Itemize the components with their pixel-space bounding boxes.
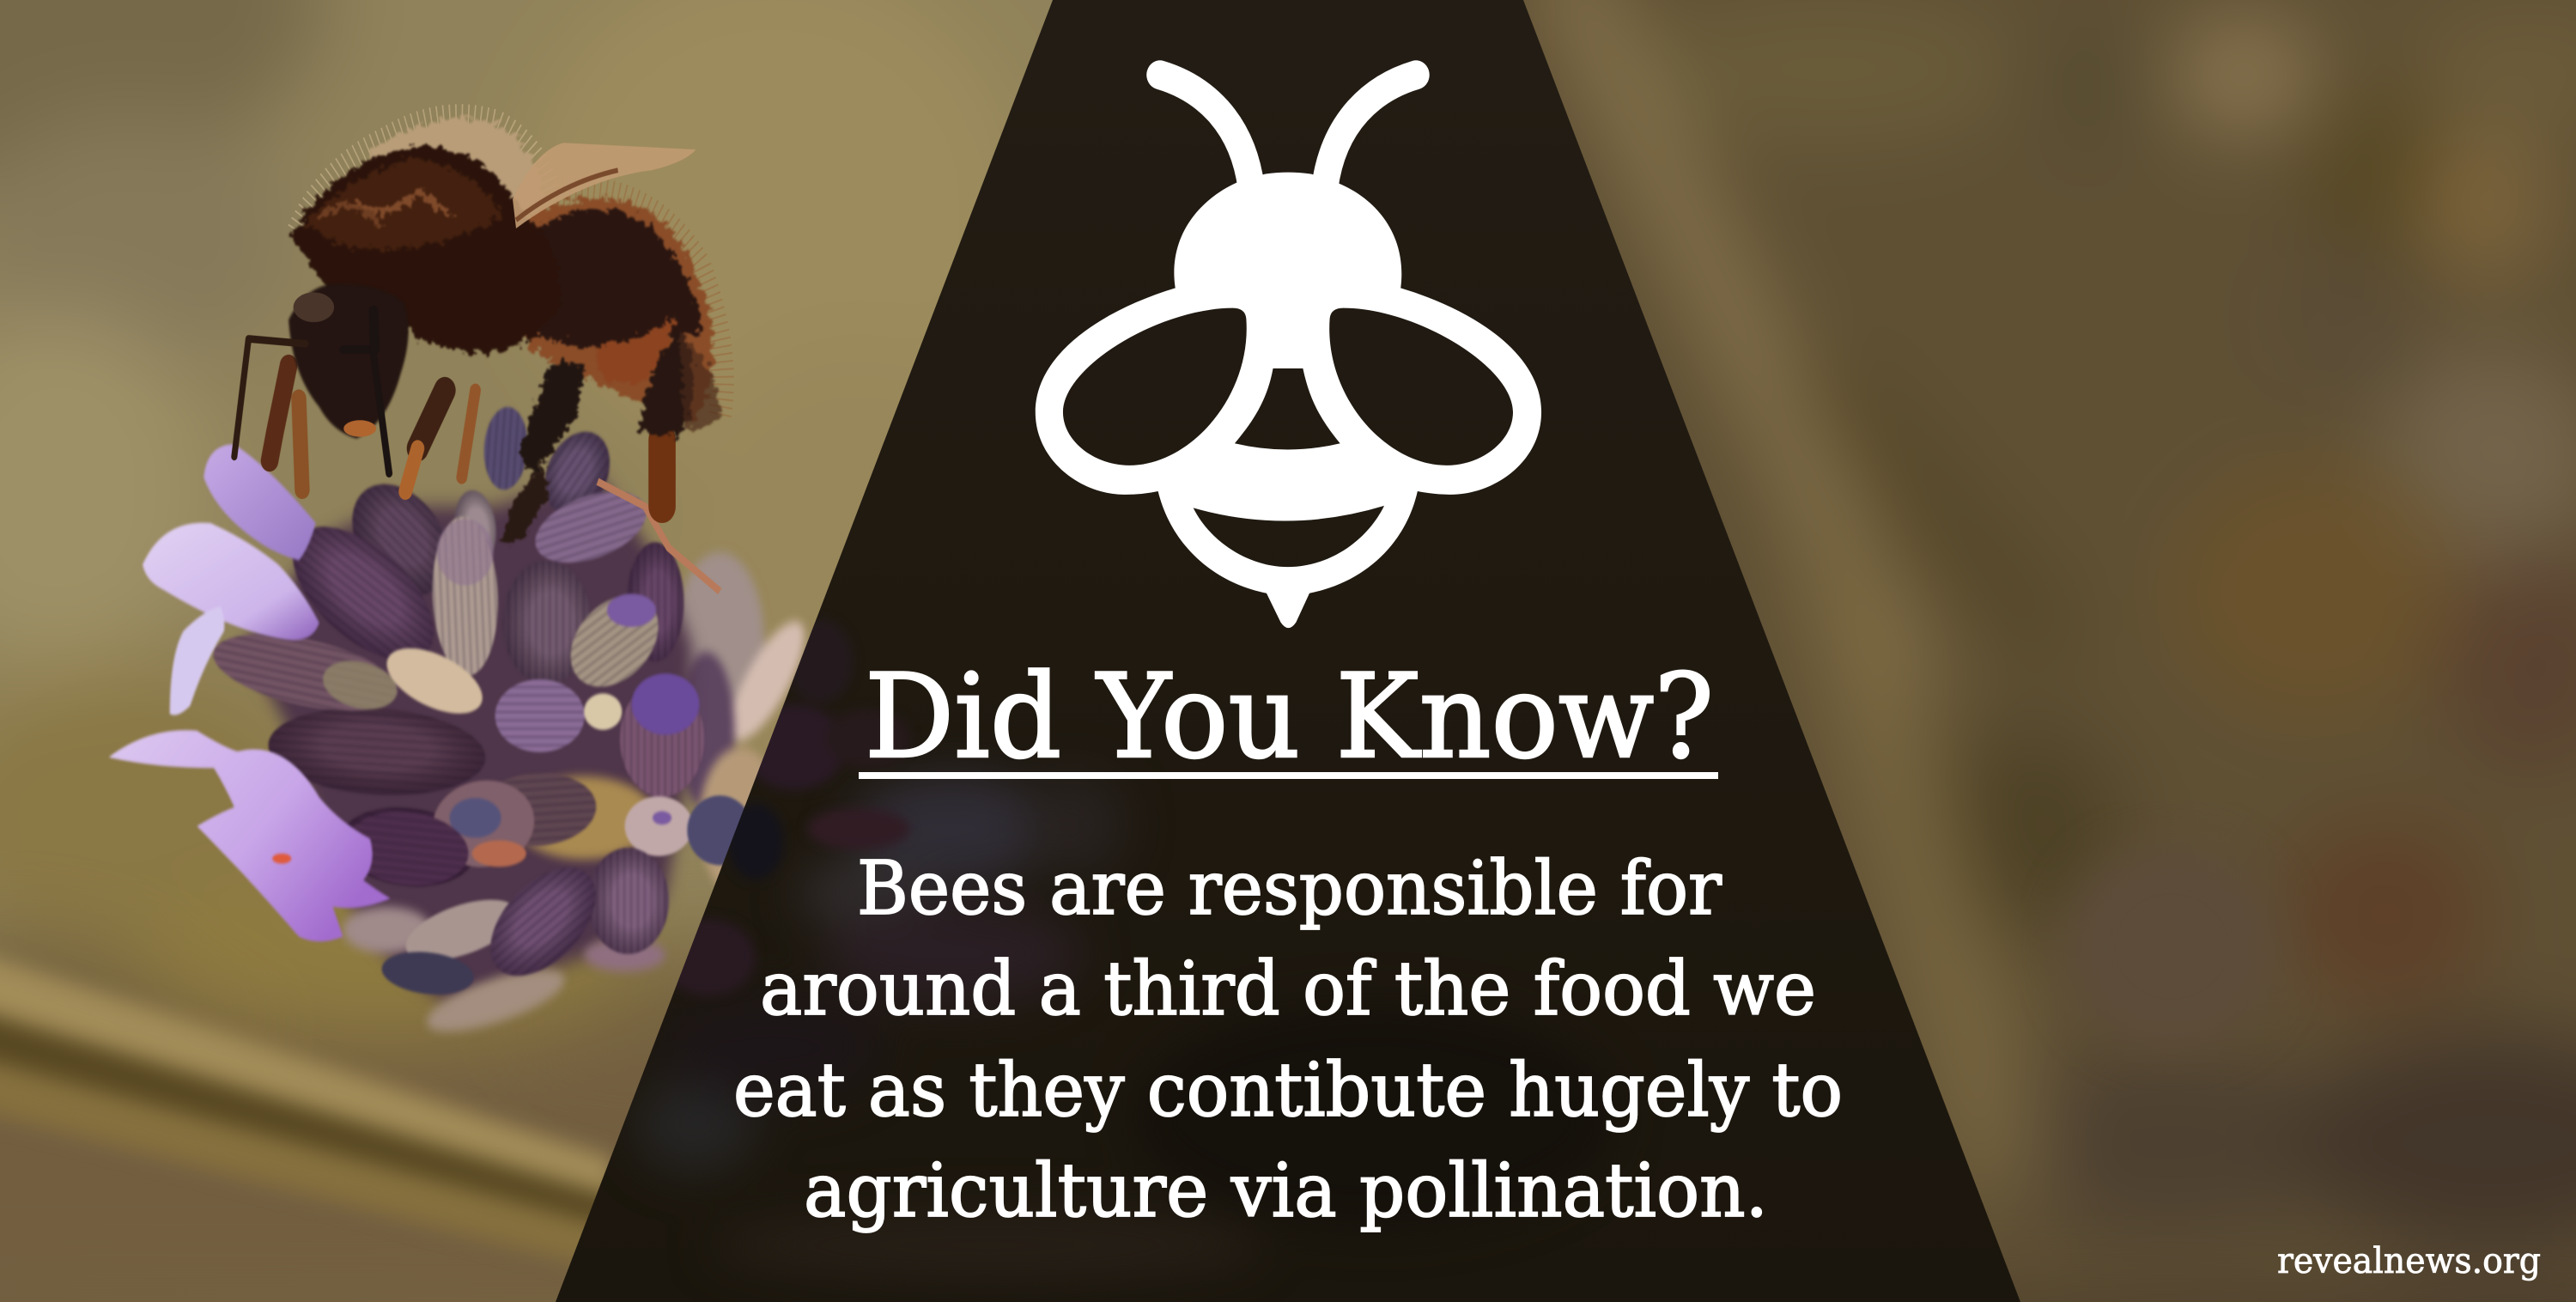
orange bee foot on buds [598,482,720,591]
body text: Bees are responsible for [857,846,1722,932]
body text: around a third of the food we [760,946,1816,1032]
bee head [289,284,409,438]
title underline [859,772,1718,779]
bee fur body [290,118,720,544]
body text: eat as they contibute hugely to [733,1048,1843,1134]
photo subject: lavender flower [109,405,817,1044]
dark triangle panel [556,0,2020,1302]
bee icon [1036,75,1541,628]
bee antennae [234,312,389,473]
source credit: revealnews.org [2277,1240,2541,1281]
back buds [209,405,752,999]
fine fur fringe [299,119,722,415]
body text [733,846,1843,1234]
body text: agriculture via pollination. [804,1148,1768,1234]
lilac petals [109,444,391,941]
soft background buds [676,552,817,897]
title: Did You Know? [865,649,1714,784]
out-of-focus stem [0,951,611,1270]
bee wing [513,143,696,228]
bee legs behind body [270,365,662,507]
photo subject: bumblebee [234,118,722,544]
dimmed flower seen through panel [635,620,1614,1280]
